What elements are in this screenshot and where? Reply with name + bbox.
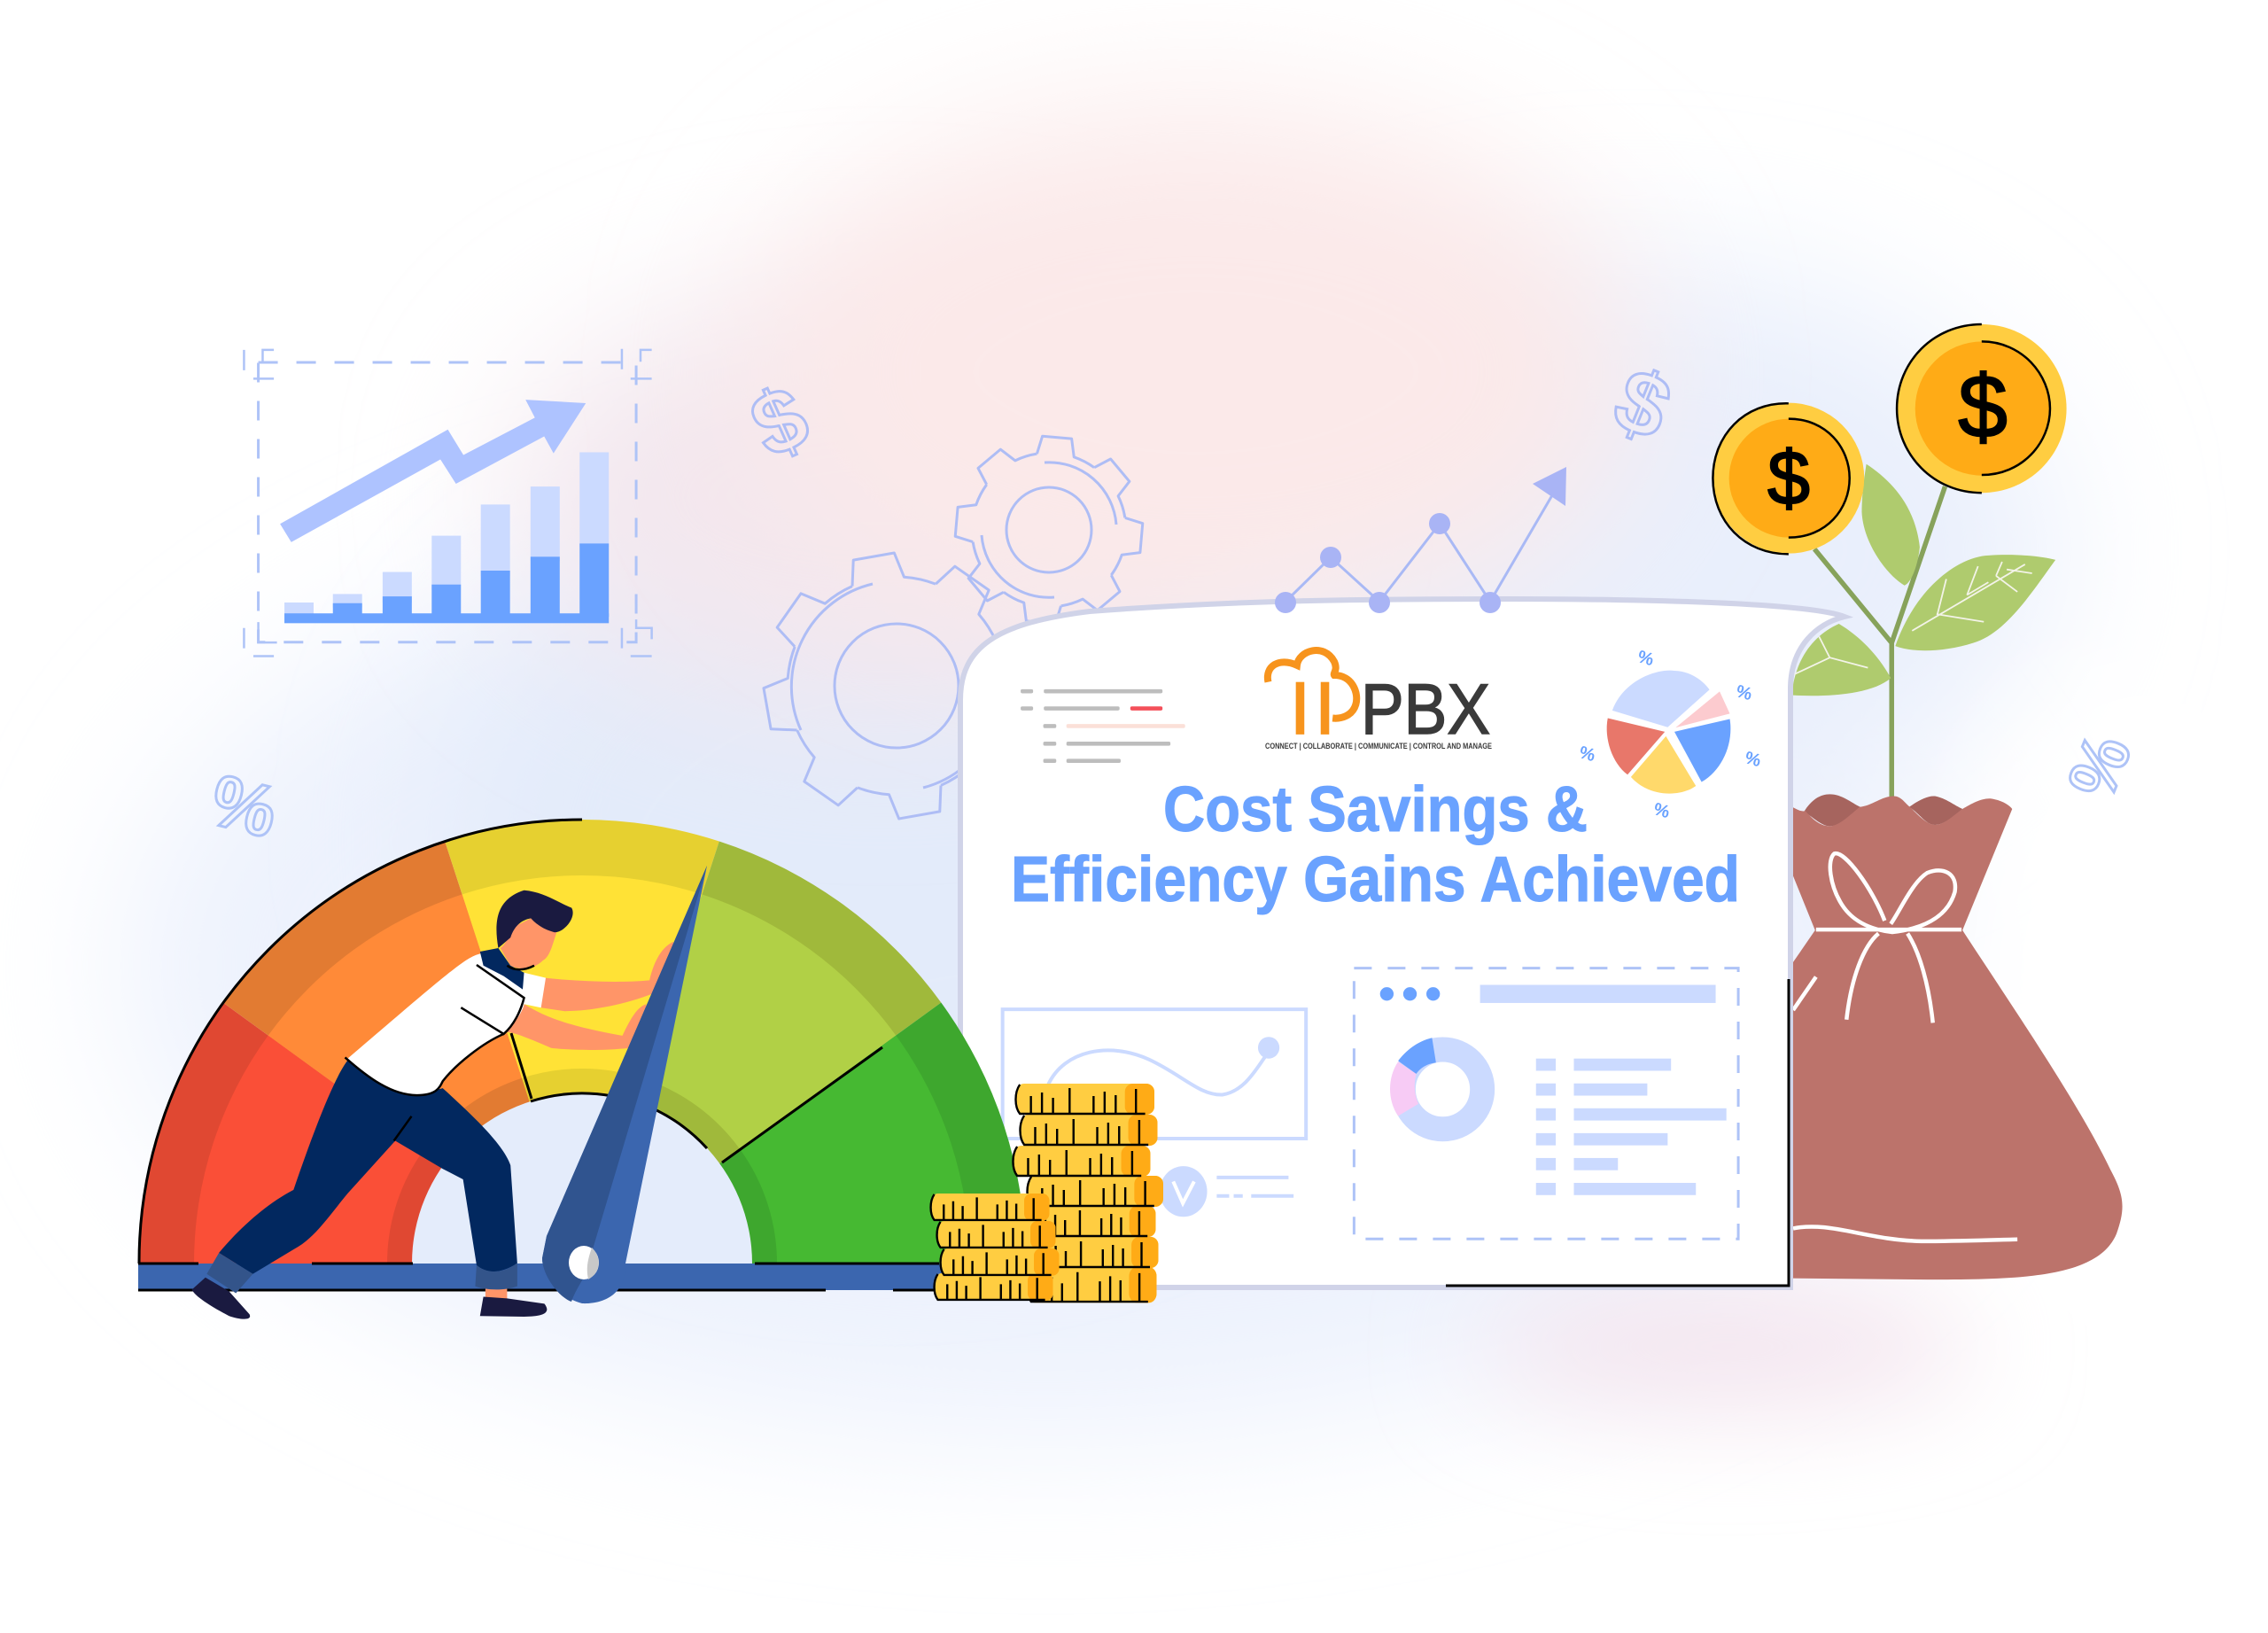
gauge base bar	[138, 1264, 980, 1290]
header bar	[1480, 985, 1716, 1003]
title: Cost Savings &	[1163, 774, 1588, 845]
title: Efficiency Gains Achieved	[1011, 844, 1740, 915]
growth chart in dashed frame	[244, 349, 652, 656]
logo mark	[1268, 650, 1356, 735]
dollar sign small coin: $	[1767, 436, 1810, 521]
line chart above card	[1285, 467, 1566, 602]
money plant	[1713, 324, 2067, 799]
percent labels around pie: %	[1577, 743, 1597, 766]
icon: outline dollar left: $	[737, 367, 822, 477]
needle	[542, 866, 707, 1303]
coin stack left	[931, 1194, 1060, 1301]
arms	[507, 942, 673, 1050]
list rows	[1536, 1059, 1727, 1195]
background colour wash	[124, 106, 2268, 1435]
scallop shade	[1804, 794, 1962, 826]
percent labels around pie: %	[1635, 647, 1656, 670]
trousers	[219, 1061, 517, 1274]
window dots	[1380, 987, 1440, 1000]
bag string and bow	[1793, 853, 2017, 1241]
collar	[480, 948, 524, 990]
dashboard panel	[1354, 968, 1738, 1239]
clothing outlines	[345, 965, 534, 1140]
money bag	[1790, 794, 2123, 1279]
trend arrow	[280, 400, 586, 542]
bars	[284, 452, 609, 623]
coin: small	[1713, 403, 1864, 554]
front ankle	[485, 1288, 507, 1299]
gauge bright band	[194, 1036, 582, 1264]
arrow head	[1533, 467, 1566, 506]
needle pivot	[569, 1246, 599, 1279]
gauge outlines	[139, 820, 882, 1264]
pie chart	[1607, 671, 1730, 794]
icon: outline percent right: %	[2054, 725, 2146, 808]
dashed frame	[259, 362, 636, 642]
line chart nodes on card edge	[1275, 592, 1501, 613]
leaf: right	[1895, 555, 2055, 650]
percent labels around pie	[1577, 647, 1763, 822]
base outlines	[138, 1264, 939, 1290]
gauge inner band	[387, 1149, 582, 1264]
head	[501, 918, 556, 968]
shoes	[192, 1278, 547, 1319]
gauge outer band	[138, 1003, 582, 1264]
card contents	[1003, 650, 1738, 1239]
icon: outline dollar right: $	[1601, 349, 1684, 459]
icon: outline percent left: %	[203, 759, 285, 853]
icon: small gear	[948, 429, 1150, 631]
bag body	[1790, 797, 2123, 1279]
leaf: top	[1861, 464, 1920, 586]
percent labels around pie: %	[1743, 748, 1763, 771]
text lines	[1021, 689, 1185, 763]
coin: large	[1897, 324, 2067, 493]
card black edge	[1446, 979, 1789, 1286]
percent labels around pie: %	[1734, 681, 1754, 704]
trouser cuffs	[206, 1253, 517, 1293]
donut chart	[1390, 1038, 1482, 1129]
hair	[496, 890, 573, 948]
shirt	[348, 953, 546, 1095]
logo tagline: CONNECT | COLLABORATE | COMMUNICATE | CONTROL AND MANAGE	[1265, 742, 1492, 750]
gauge centre opening	[412, 1093, 752, 1264]
check badge	[1160, 1166, 1293, 1217]
document card	[960, 592, 1845, 1287]
leaf: left	[1793, 624, 1891, 696]
percent labels around pie: %	[1651, 799, 1672, 822]
logo wordmark: PBX	[1361, 670, 1490, 750]
speedometer gauge	[138, 820, 1026, 1290]
title	[1011, 774, 1740, 915]
coin stack right	[1013, 1084, 1163, 1303]
icon: large gear	[712, 502, 1081, 870]
curve box	[1003, 1009, 1306, 1139]
corner brackets	[244, 349, 652, 656]
stems	[1814, 486, 1945, 799]
man pushing needle	[192, 890, 673, 1319]
dollar sign large coin: $	[1958, 357, 2008, 456]
